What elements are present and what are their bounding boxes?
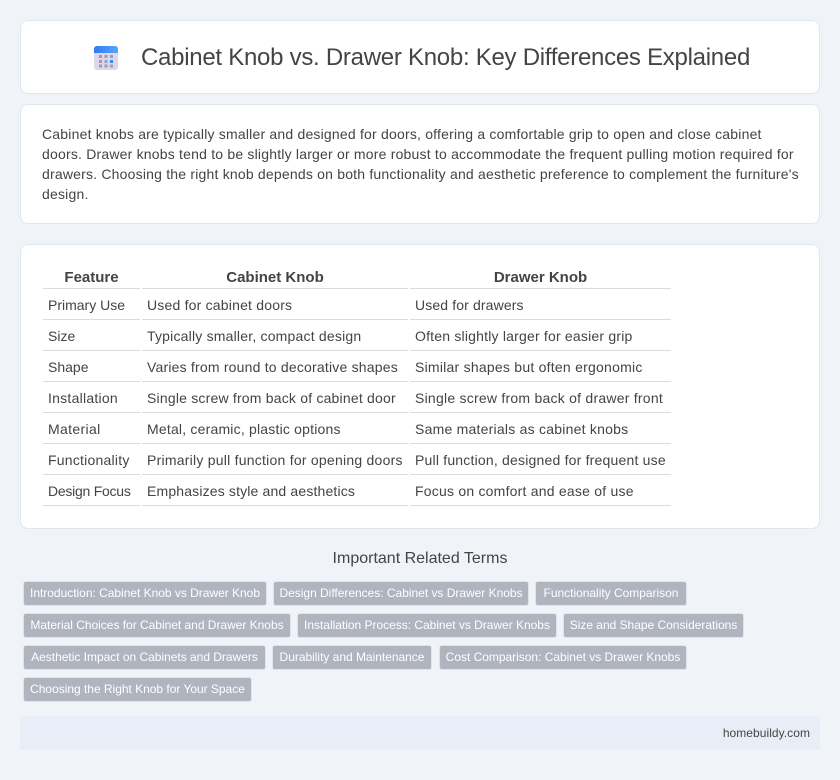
comparison table: Single screw from back of drawer front <box>415 390 663 406</box>
intro text: doors. Drawer knobs tend to be slightly larger or more robust to accommodate the frequent pulling motion required for <box>42 146 794 162</box>
comparison table: Cabinet Knob <box>226 269 324 286</box>
related terms tags: Size and Shape Considerations <box>570 618 737 632</box>
comparison table: Shape <box>48 359 88 375</box>
related terms tags: Choosing the Right Knob for Your Space <box>30 682 245 696</box>
intro text: drawers. Choosing the right knob depends on both functionality and aesthetic preference to complement the furniture's <box>42 166 799 182</box>
comparison table: Primary Use <box>48 297 125 313</box>
comparison table: Used for drawers <box>415 297 524 313</box>
header panel <box>20 20 820 94</box>
title: Cabinet Knob vs. Drawer Knob: Key Differences Explained <box>141 44 750 71</box>
intro text: design. <box>42 186 89 202</box>
comparison table: Often slightly larger for easier grip <box>415 328 632 344</box>
icon: calendar <box>94 46 118 70</box>
comparison table <box>43 269 671 506</box>
comparison table: Focus on comfort and ease of use <box>415 483 634 499</box>
comparison table: Metal, ceramic, plastic options <box>147 421 341 437</box>
comparison table: Similar shapes but often ergonomic <box>415 359 643 375</box>
comparison table: Feature <box>64 269 119 286</box>
related terms tags: Material Choices for Cabinet and Drawer Knobs <box>30 618 284 632</box>
comparison table: Varies from round to decorative shapes <box>147 359 398 375</box>
comparison table: Functionality <box>48 452 130 468</box>
comparison table: Typically smaller, compact design <box>147 328 361 344</box>
related terms heading: Important Related Terms <box>333 550 507 567</box>
related terms tags: Cost Comparison: Cabinet vs Drawer Knobs <box>446 650 680 664</box>
comparison table: Drawer Knob <box>494 269 587 286</box>
comparison table: Used for cabinet doors <box>147 297 292 313</box>
comparison table: Single screw from back of cabinet door <box>147 390 396 406</box>
comparison table: Emphasizes style and aesthetics <box>147 483 355 499</box>
comparison table: Material <box>48 421 101 437</box>
related terms tags: Installation Process: Cabinet vs Drawer Knobs <box>304 618 550 632</box>
intro text <box>42 126 799 202</box>
comparison table: Same materials as cabinet knobs <box>415 421 628 437</box>
intro panel <box>20 104 820 224</box>
related terms tags: Aesthetic Impact on Cabinets and Drawers <box>31 650 258 664</box>
comparison table: Pull function, designed for frequent use <box>415 452 666 468</box>
comparison table: Size <box>48 328 75 344</box>
related terms tags: Design Differences: Cabinet vs Drawer Knobs <box>279 586 523 600</box>
comparison table: Primarily pull function for opening doors <box>147 452 403 468</box>
footer bar <box>20 716 820 750</box>
related terms tags: Introduction: Cabinet Knob vs Drawer Knob <box>30 586 260 600</box>
related terms tags <box>23 581 744 702</box>
comparison table: Installation <box>48 390 118 406</box>
related terms tags: Durability and Maintenance <box>280 650 424 664</box>
intro text: Cabinet knobs are typically smaller and designed for doors, offering a comfortable grip to open and close cabinet <box>42 126 762 142</box>
related terms tags: Functionality Comparison <box>544 586 678 600</box>
comparison table: Design Focus <box>48 483 131 499</box>
table panel <box>20 244 820 529</box>
footer source: homebuildy.com <box>723 726 810 740</box>
